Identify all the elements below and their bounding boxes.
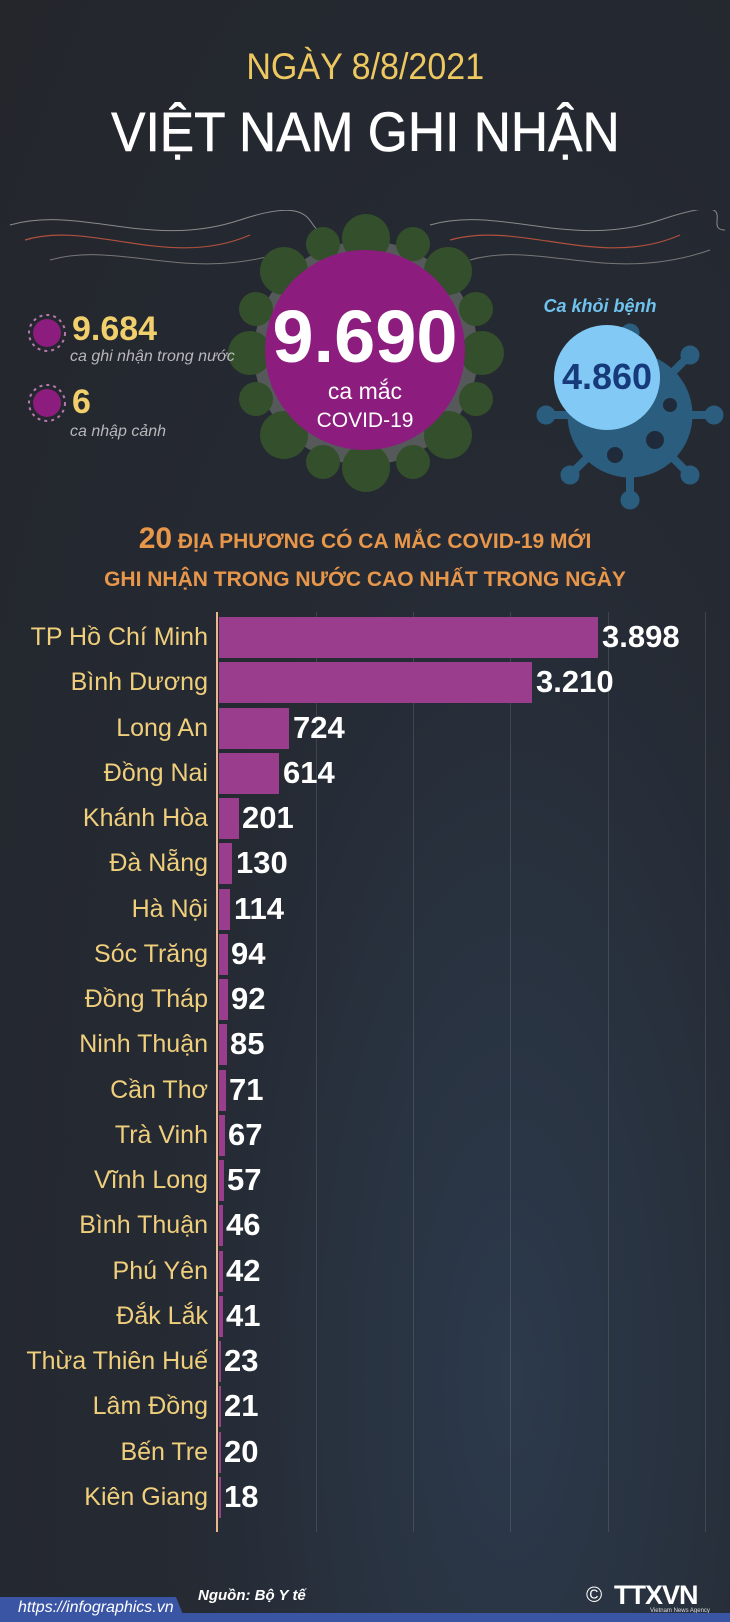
icon: small virus 2 [28,384,66,422]
recovered circle: 4.860 [562,356,652,397]
chart heading [104,522,626,591]
bar chart: 18 [224,1479,258,1514]
bar chart: 23 [224,1343,258,1378]
logo: TTXVN: Vietnam News Agency [650,1608,710,1614]
bar chart: 201 [242,800,294,835]
bar chart: Đồng Tháp [85,985,208,1013]
bar chart: 3.210 [536,664,614,699]
bar chart: Vĩnh Long [94,1166,208,1194]
title date: NGÀY 8/8/2021 [246,46,484,87]
bar chart: Thừa Thiên Huế [26,1347,208,1375]
domestic cases block: ca ghi nhận trong nước [70,348,235,365]
bar chart: 614 [283,755,335,790]
main circle: total cases: ca mắc [328,378,402,404]
bar chart: 42 [226,1253,260,1288]
bar chart: 57 [227,1162,261,1197]
bar chart: Ninh Thuận [79,1030,208,1058]
bar chart: Lâm Đồng [93,1392,208,1420]
bar chart: 94 [231,936,265,971]
recovered label: Ca khỏi bệnh [543,296,656,316]
bar chart: Đồng Nai [104,759,208,787]
bar chart: 3.898 [602,619,680,654]
bar chart: Hà Nội [132,895,208,923]
icon: small virus 1 [28,314,66,352]
bar chart: 67 [228,1117,262,1152]
title main: VIỆT NAM GHI NHẬN [111,100,619,163]
bar chart: 85 [230,1026,264,1061]
domestic cases block: 9.684 [72,310,157,348]
chart heading: 20 ĐỊA PHƯƠNG CÓ CA MẮC COVID-19 MỚI [139,522,591,555]
bar chart: Kiên Giang [84,1483,208,1511]
bar chart: 114 [234,891,284,926]
decorative waves [10,210,725,264]
bar chart: TP Hồ Chí Minh [31,623,208,651]
bar chart: Đắk Lắk [116,1302,208,1330]
bar chart: 130 [236,845,288,880]
logo: TTXVN: © [586,1582,602,1607]
bar chart: Đà Nẵng [109,849,208,877]
bar chart: 92 [231,981,265,1016]
icon: blue virus [536,324,724,510]
footer band [0,1613,730,1622]
bar chart: Bến Tre [120,1438,208,1466]
bar chart: Cần Thơ [110,1076,208,1104]
main circle: total cases [265,250,465,450]
bar chart: 71 [229,1072,263,1107]
icon: green coronavirus [228,214,504,492]
recovered circle [554,325,660,430]
domestic cases block [28,310,235,440]
bar chart: Bình Dương [71,668,208,696]
bar chart: 46 [226,1207,260,1242]
bar chart: 21 [224,1388,258,1423]
bar chart: 41 [226,1298,260,1333]
domestic cases block: 6 [72,383,91,421]
bar chart: Long An [116,714,208,742]
logo: TTXVN [586,1580,710,1614]
chart heading: GHI NHẬN TRONG NƯỚC CAO NHẤT TRONG NGÀY [104,568,626,591]
bar chart: 724 [293,710,345,745]
main circle: total cases: COVID-19 [317,409,413,432]
logo: TTXVN: TTXVN [614,1580,698,1610]
bar chart: Bình Thuận [79,1211,208,1239]
source note: Nguồn: Bộ Y tế [198,1587,306,1604]
main circle: total cases: 9.690 [272,295,458,378]
domestic cases block: ca nhập cảnh [70,423,166,440]
footer url tab: https://infographics.vn [18,1599,174,1616]
bar chart: 20 [224,1434,258,1469]
bar chart: Phú Yên [113,1257,208,1285]
bar chart: Trà Vinh [115,1121,208,1149]
bar chart: Khánh Hòa [83,804,208,832]
bar chart: Sóc Trăng [94,940,208,968]
